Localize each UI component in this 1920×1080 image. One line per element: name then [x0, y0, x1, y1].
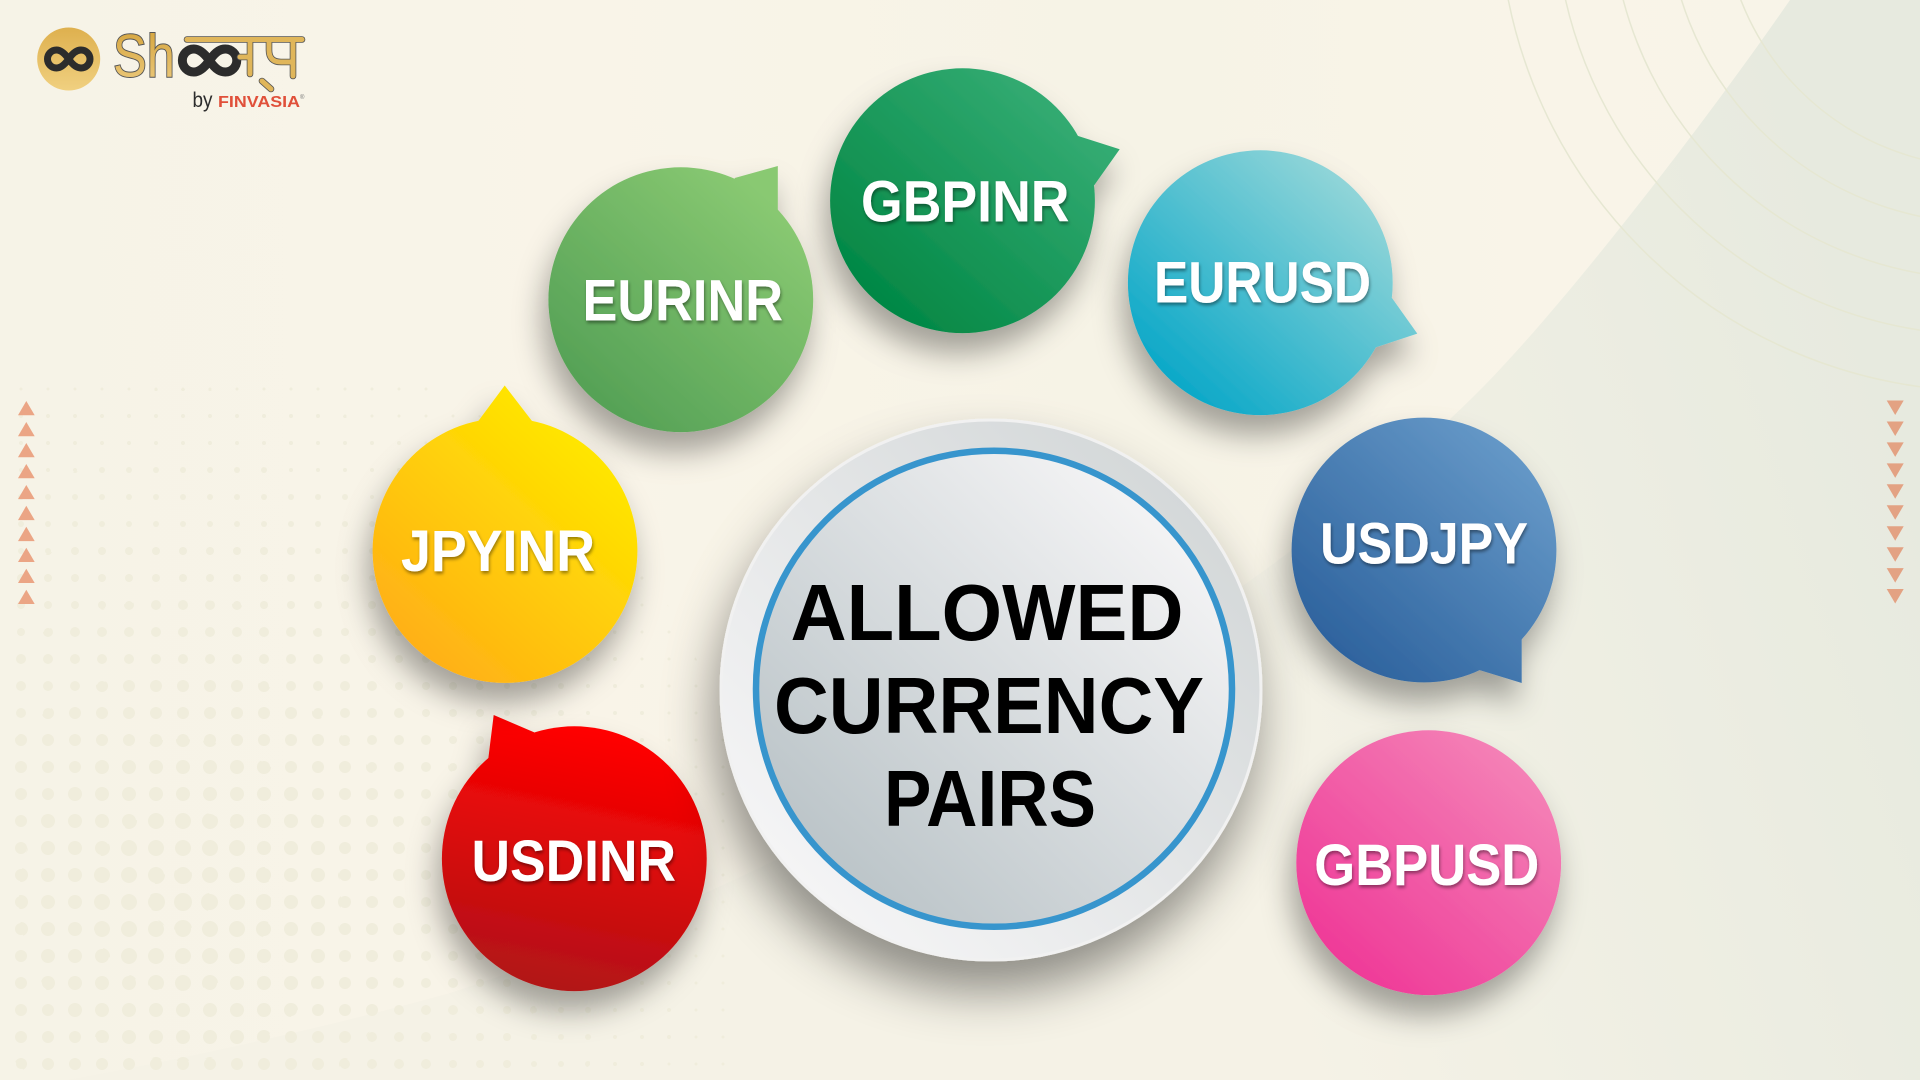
outer grey disc: [721, 420, 1261, 960]
bubble: EURUSD: [1128, 150, 1417, 415]
bubble: USDINR: [442, 715, 707, 991]
logo: Shoonya by Finvasia: [37, 22, 305, 112]
logo byline: ®: [300, 94, 305, 101]
bubble: EURUSD: EURUSD: [1154, 251, 1371, 316]
title: CURRENCY: [774, 661, 1204, 750]
decorative halftone dot field, bottom left: [8, 376, 736, 1078]
logo byline: by: [192, 89, 213, 112]
bubble: EURINR: EURINR: [582, 269, 783, 334]
decorative concentric arcs, top right: [1499, 0, 1920, 391]
bubble: JPYINR: [373, 386, 637, 683]
icon: left column of up-pointing triangles: [18, 401, 35, 604]
bubble: USDJPY: USDJPY: [1320, 512, 1528, 577]
bubble: GBPUSD: GBPUSD: [1314, 833, 1539, 898]
bubble: JPYINR: JPYINR: [401, 519, 595, 584]
bubble: GBPUSD: [1296, 730, 1561, 995]
inner disc with blue ring: [756, 451, 1232, 927]
bubble: GBPINR: [830, 68, 1120, 333]
central disc with title: [721, 420, 1261, 960]
title: PAIRS: [884, 754, 1096, 843]
bubble: GBPINR: GBPINR: [861, 170, 1070, 235]
bubble: EURINR: [548, 166, 813, 432]
icon: right column of down-pointing triangles: [1887, 400, 1904, 604]
title: ALLOWED: [790, 568, 1184, 657]
logo wordmark Sh: Sh: [113, 22, 175, 90]
logo byline: [192, 89, 305, 112]
icon: logo infinity and Devanagari-style strokes: [182, 40, 302, 89]
logo byline: FINVASIA: [218, 94, 300, 111]
bubble: USDJPY: [1292, 418, 1556, 683]
bubble: USDINR: USDINR: [472, 829, 676, 894]
title: [774, 568, 1204, 843]
icon: gold infinity badge: [37, 28, 100, 90]
